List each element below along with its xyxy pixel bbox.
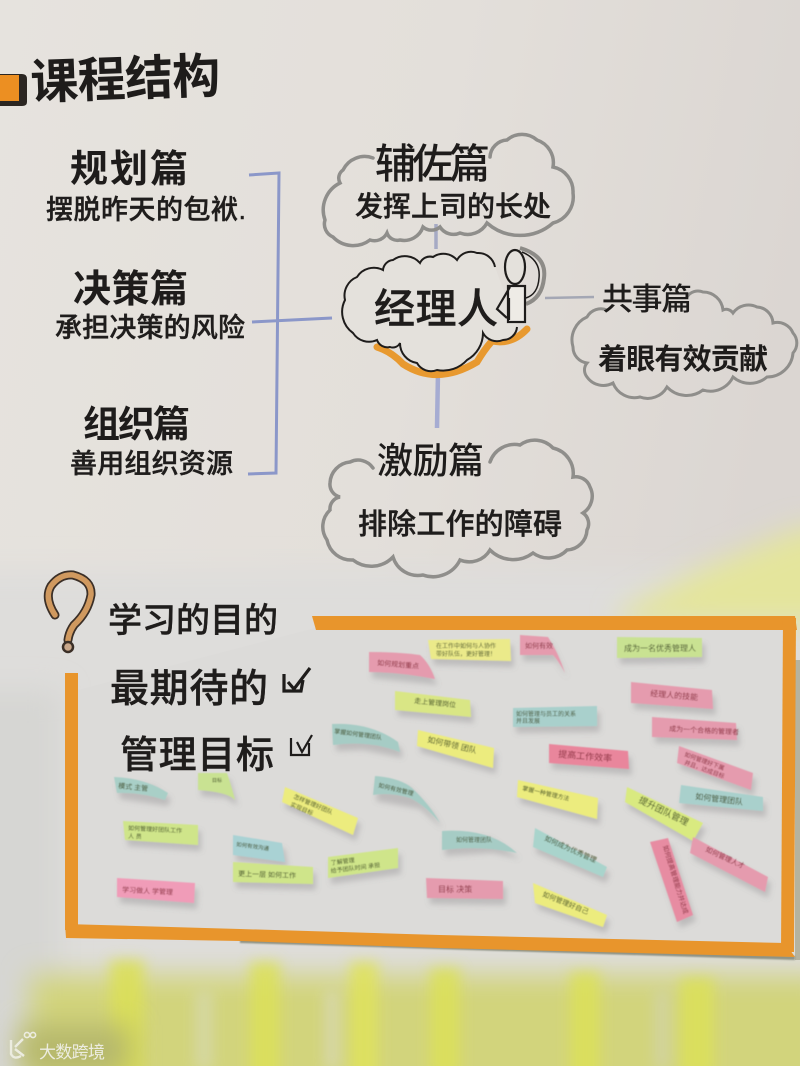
note: teal 16: 如何有效管理 — [378, 781, 414, 798]
note: yellow 2 — [428, 639, 511, 661]
note: pink 3: 如何有效 — [525, 641, 553, 650]
note: green 29: 了解管理 — [330, 856, 355, 867]
item: decision — [55, 269, 245, 343]
note: teal 16 — [373, 776, 440, 823]
note: teal 9: 掌握如何管理团队 — [334, 727, 382, 742]
note: teal 23 — [114, 777, 168, 800]
board sheet — [78, 628, 783, 944]
note: green 29 — [328, 848, 398, 878]
note: teal 27 — [233, 835, 285, 862]
note: teal 17 — [442, 831, 517, 853]
heading: most expected: 最期待的 — [110, 668, 268, 711]
item: decision: 承担决策的风险 — [55, 313, 245, 343]
cloud: manager centre — [342, 248, 544, 375]
cloud: contribution chapter — [572, 282, 797, 398]
cloud: manager centre: 经理人 — [374, 286, 498, 332]
cloud: contribution chapter: 共事篇 — [602, 282, 692, 317]
note: teal 27: 如何有效沟通 — [236, 840, 270, 853]
note: pink 21 — [426, 878, 503, 899]
note: teal 13 — [679, 785, 763, 811]
note: green 28: 更上一层 如何工作 — [238, 869, 296, 880]
item: decision: 决策篇 — [73, 269, 188, 311]
left list: planning / decision / organisation — [46, 149, 246, 479]
note: pink 21: 目标 决策 — [438, 884, 472, 894]
icon: checkbox two — [291, 735, 312, 755]
note: pink 20: 如何管理人才 — [704, 845, 746, 871]
note: green 4: 成为一名优秀管理人 — [624, 643, 696, 653]
note: yellow 25: 实现目标 — [289, 800, 314, 817]
title icon: orange square — [0, 74, 27, 106]
note: yellow 25: 怎样管理好团队 — [292, 792, 334, 816]
watermark text: 大数跨境 — [39, 1043, 105, 1062]
note: yellow 2: 在工作中如何与人协作 — [436, 642, 496, 650]
note: pink 20 — [690, 837, 768, 892]
note: lime 15 — [625, 787, 703, 841]
orange frame — [65, 616, 797, 957]
item: planning — [46, 149, 246, 225]
note: pink 19 — [650, 838, 693, 922]
note: green 4 — [617, 637, 702, 658]
title: 课程结构 — [30, 50, 221, 110]
note: yellow 22 — [533, 883, 607, 927]
item: organisation: 善用组织资源 — [70, 449, 233, 479]
note: pink 19: 如何提高管理能力并达成 — [661, 844, 691, 915]
note: pink 6: 经理人的技能 — [650, 688, 699, 702]
note: pink 30 — [117, 878, 195, 903]
board shadow — [240, 941, 795, 958]
note: lime 5: 走上管理岗位 — [414, 696, 457, 709]
note: pink 3 — [520, 635, 565, 673]
cloud: assisting chapter — [323, 134, 573, 246]
note: teal 8: 并且发展 — [516, 717, 540, 725]
cloud: assisting chapter: 辅佐篇 — [375, 141, 490, 187]
note: teal 23: 模式 主管 — [118, 781, 149, 793]
note: yellow 14 — [517, 780, 598, 819]
watermark logo — [11, 1032, 36, 1058]
note: pink 12 — [677, 746, 753, 790]
note: lime 5 — [395, 691, 471, 717]
note: teal 18 — [533, 828, 607, 877]
bracket connector — [248, 173, 332, 474]
note: yellow 14: 掌握一种管理方法 — [522, 784, 570, 803]
cloud outline — [342, 252, 517, 371]
item: planning: 摆脱昨天的包袱. — [46, 195, 246, 225]
note: yellow 10 — [417, 730, 494, 768]
note: pink 11 — [549, 744, 629, 769]
note: teal 17: 如何管理团队 — [456, 836, 492, 844]
note: pink 6 — [631, 682, 713, 709]
note: pink 1: 如何规划重点 — [377, 658, 419, 671]
cloud: assisting chapter: 发挥上司的长处 — [355, 191, 551, 222]
note: green 26: 如何管理好团队工作 — [128, 824, 182, 835]
note: pink 7 — [652, 717, 739, 740]
note: green 26: 人 员 — [128, 833, 142, 841]
note: pink 7: 成为一个合格的管理者 — [669, 724, 739, 737]
note: green 24: 目标 — [212, 777, 222, 784]
item: planning: 规划篇 — [70, 149, 188, 191]
cloud: contribution chapter: 着眼有效贡献 — [598, 343, 768, 376]
connector: top cloud — [434, 224, 438, 249]
cloud: motivation chapter: 激励篇 — [377, 440, 484, 481]
icon: checkbox one — [284, 668, 310, 691]
note: pink 12: 并且，达成目标 — [683, 758, 726, 780]
heading: management goals: 管理目标 — [120, 735, 274, 777]
cloud: motivation chapter — [323, 440, 592, 577]
watermark — [11, 1032, 105, 1062]
orange shadow — [377, 329, 527, 375]
note: green 29: 给予团队时间 承担 — [330, 861, 381, 875]
item: organisation — [70, 404, 233, 479]
note: yellow 10: 如何带领 团队 — [427, 734, 478, 755]
note: pink 1 — [369, 652, 435, 679]
note: yellow 22: 如何管理好自己 — [541, 890, 590, 916]
note: lime 15: 提升团队管理 — [637, 794, 690, 827]
icon: person — [497, 248, 544, 322]
note: yellow 2: 带好队伍，更好管理！ — [436, 650, 496, 658]
cloud: motivation chapter: 排除工作的障碍 — [358, 508, 562, 541]
note: teal 8: 如何管理与员工的关系 — [516, 710, 576, 718]
note: green 28 — [233, 862, 313, 884]
note: teal 8 — [513, 706, 597, 727]
note: pink 30: 学习做人 学管理 — [122, 885, 173, 897]
panel: learning goals board — [65, 616, 797, 958]
note: green 24 — [198, 773, 235, 800]
sticky notes — [114, 635, 771, 933]
note: pink 11: 提高工作效率 — [558, 748, 613, 764]
connector: bottom cloud — [437, 372, 438, 428]
icon: question mark — [48, 575, 91, 652]
note: green 26 — [123, 821, 198, 845]
heading: learning purpose: 学习的目的 — [108, 602, 278, 640]
note: teal 18: 如何成为优秀管理 — [543, 834, 598, 865]
note: pink 12: 如何管理好下属 — [683, 750, 726, 772]
item: organisation: 组织篇 — [83, 404, 190, 445]
note: teal 13: 如何管理团队 — [695, 791, 744, 807]
note shadows — [117, 641, 771, 933]
note: yellow 25 — [282, 787, 358, 835]
connector: right cloud — [545, 297, 594, 298]
note: teal 9 — [332, 724, 400, 752]
